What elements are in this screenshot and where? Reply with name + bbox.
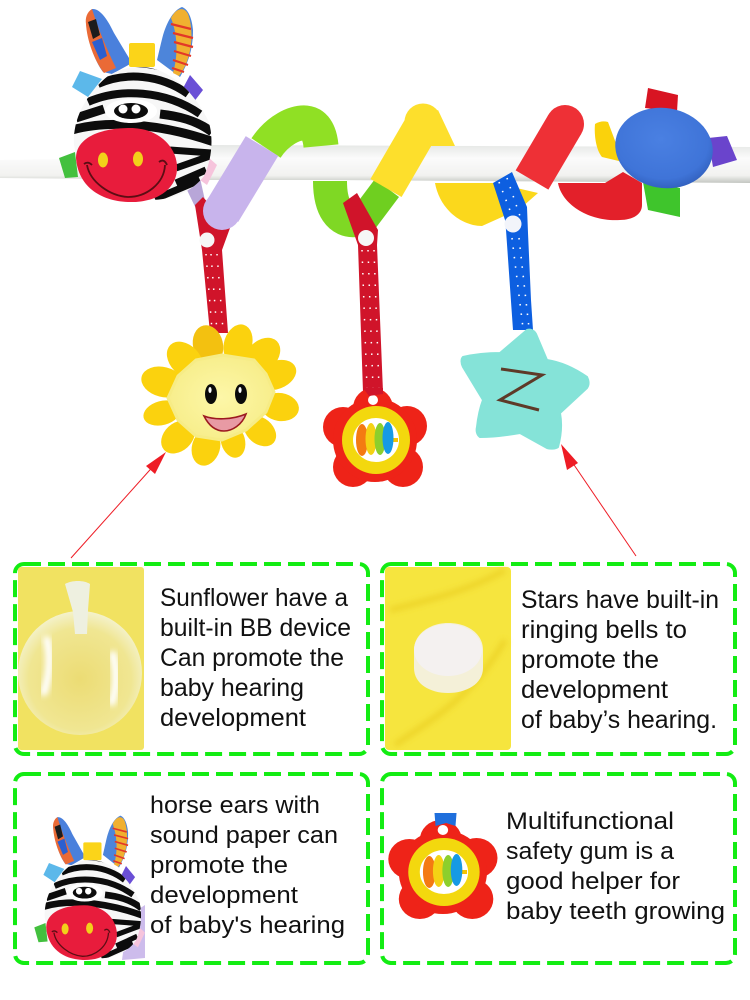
lower coils of the spiral <box>187 172 642 226</box>
text: star description: ringing bells to <box>521 616 687 644</box>
zebra head <box>59 7 217 202</box>
text: sunflower description: development <box>160 704 306 732</box>
text: safety gum description: Multifunctional <box>506 808 674 835</box>
lower green coil <box>330 181 356 220</box>
panel: horse ears <box>15 774 368 963</box>
text: safety gum description: good helper for <box>506 868 680 895</box>
text: horse ears description: sound paper can <box>150 822 338 849</box>
panel: sunflower BB device <box>15 564 368 754</box>
strap: star ribbon <box>493 172 533 330</box>
icon: teether thumbnail <box>388 813 498 919</box>
rising green segment <box>360 188 387 224</box>
upper green tube <box>266 123 321 148</box>
upper red tube <box>532 124 565 180</box>
snap button <box>358 230 374 246</box>
photo: ringing bell <box>385 567 511 750</box>
text: horse ears description: of baby's hearing <box>150 912 345 939</box>
text: sunflower description: Can promote the <box>160 644 344 672</box>
ball <box>609 100 719 196</box>
text: sunflower description: baby hearing <box>160 674 304 702</box>
text: star description: promote the <box>521 646 659 674</box>
text: sunflower description: Sunflower have a <box>160 584 348 612</box>
arrow: star <box>561 444 636 556</box>
upper tubes of the spiral <box>203 104 584 230</box>
lower yellow coil <box>435 183 538 226</box>
text: horse ears description: development <box>150 882 298 909</box>
yellow tag <box>595 121 623 162</box>
text: horse ears description: promote the <box>150 852 288 879</box>
green tag <box>643 182 680 217</box>
text: star description: Stars have built-in <box>521 586 719 614</box>
panel: star bells <box>382 564 735 754</box>
red tag <box>645 88 678 112</box>
blue ball rattle <box>595 88 737 217</box>
text: horse ears description: horse ears with <box>150 792 320 819</box>
strap: teether ribbon <box>343 193 383 392</box>
lower red coil <box>558 172 642 220</box>
lavender under-loop <box>187 178 206 217</box>
text: safety gum description: baby teeth growing <box>506 898 725 925</box>
purple tag <box>708 136 737 167</box>
text: star description: of baby’s hearing. <box>521 706 717 734</box>
text: star description: development <box>521 676 668 704</box>
sunflower <box>138 321 301 469</box>
icon: zebra thumbnail <box>34 816 145 960</box>
snap button: sunflower strap <box>200 232 214 248</box>
rod <box>0 145 750 183</box>
upper yellow tube <box>386 126 422 188</box>
teether <box>323 388 427 487</box>
text: sunflower description: built-in BB device <box>160 614 351 642</box>
star <box>462 330 588 449</box>
text: safety gum description: safety gum is a <box>506 838 675 865</box>
photo: BB device <box>18 567 144 750</box>
snap button <box>504 216 522 232</box>
arrow: sunflower <box>71 452 166 558</box>
strap: sunflower ribbon <box>195 197 230 333</box>
lavender tube <box>222 146 262 212</box>
panel: safety gum <box>382 774 735 963</box>
